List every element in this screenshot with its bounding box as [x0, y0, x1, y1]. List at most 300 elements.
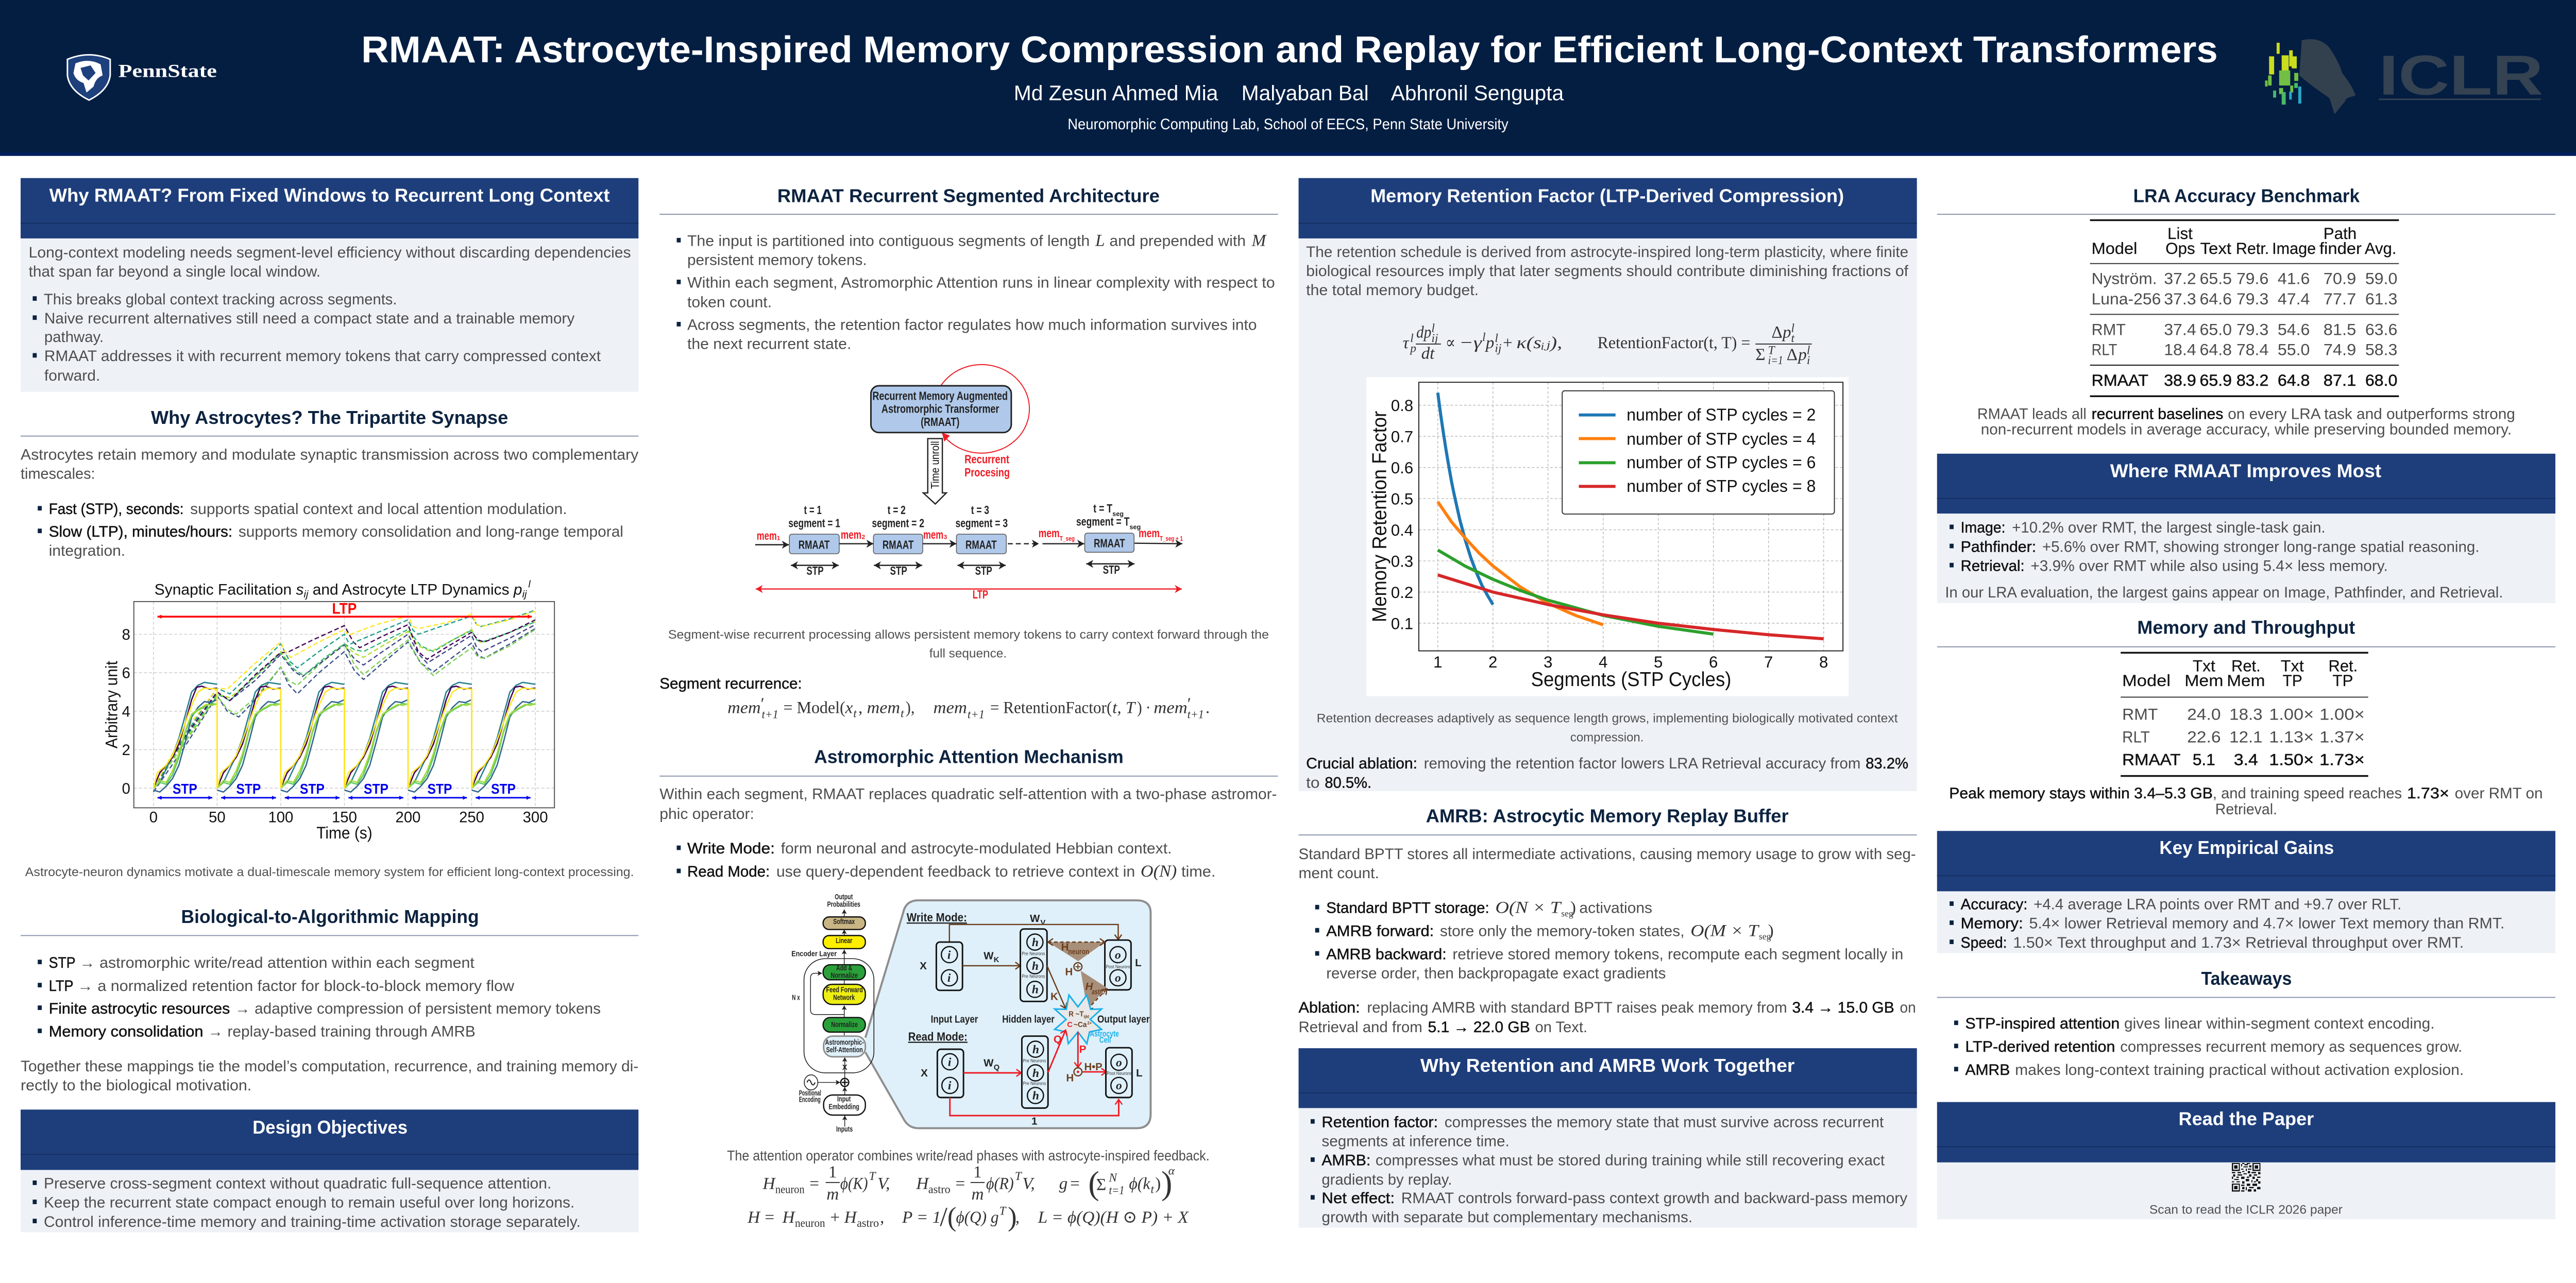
equations: retention factor: i [1807, 354, 1810, 367]
equations: retention factor: κ(sᵢⱼ), [1516, 333, 1562, 352]
affiliation: Neuromorphic Computing Lab, School of EECS, Penn State University [1067, 116, 1509, 133]
text block: Astrocytes retain memory and modulate synaptic transmission across two complementary [21, 447, 639, 464]
icon: astrocyte cell star: ~Ca [1074, 1021, 1087, 1029]
row: RLT: 74.9 [2324, 340, 2356, 358]
read mode: Q [1054, 1033, 1062, 1045]
equations: retention factor: Δ [1787, 345, 1798, 364]
read mode: X [921, 1067, 928, 1079]
row: RMT: 1.00× [2269, 705, 2314, 723]
segment boxes: RMAAT [1094, 536, 1125, 550]
equation: segment recurrence: mem [1154, 698, 1188, 717]
equations: attention operator: m [971, 1185, 984, 1204]
write mode: H [1065, 966, 1073, 978]
row: RMT: RMT [2122, 705, 2158, 723]
text block: forward. [44, 367, 100, 384]
encoder stack: Add & [836, 964, 853, 972]
callout: ablation: on Text. [1535, 1019, 1587, 1036]
memory labels: T_seg [1060, 535, 1075, 542]
text block [21, 1058, 638, 1094]
axis labels: Memory Retention Factor [1368, 411, 1391, 622]
equations: retention factor: l [1482, 331, 1485, 344]
chart: synaptic facilitation and LTP dynamics: and Astrocyte LTP Dynamics [308, 581, 514, 598]
box: RMAAT main: (RMAAT) [921, 415, 959, 429]
mapping list: Memory consolidation [49, 1023, 204, 1040]
row: RLT: 55.0 [2278, 340, 2310, 358]
equations: attention operator: V, [877, 1174, 890, 1193]
row: RMT: 79.3 [2236, 320, 2268, 338]
write mode: Pre Neurons [1022, 973, 1045, 979]
caption: on every LRA task and outperforms strong [2228, 405, 2515, 422]
solid STP curves [154, 682, 535, 792]
row: RLT: RLT [2092, 340, 2117, 358]
time labels: segment = 2 [872, 516, 924, 529]
table: accuracy: Model [2092, 240, 2137, 258]
callout: ablation: Retrieval and from [1299, 1019, 1422, 1036]
axis labels: 1 [1433, 653, 1442, 671]
memory labels [757, 526, 1183, 542]
text block: the total memory budget. [1306, 282, 1479, 299]
bullets: seg [1561, 908, 1573, 918]
segment boxes [789, 533, 1134, 554]
equation: segment recurrence: ), [906, 698, 914, 717]
STP arrows: STP [173, 781, 197, 797]
equations: attention operator: ) [1155, 1174, 1161, 1193]
text block: time. [1181, 863, 1215, 880]
write mode: K [1050, 990, 1058, 1002]
equations: retention factor: −γ [1459, 333, 1482, 352]
bullets: reverse order, then backpropagate exact gradients [1326, 965, 1666, 982]
row: RLT [2092, 340, 2397, 358]
text block: rectly to the biological motivation. [21, 1077, 251, 1094]
bullets: 5.4× lower Retrieval memory and 4.7× lower Text memory than RMT. [2029, 915, 2504, 932]
equations: attention operator: T [1015, 1170, 1023, 1183]
write mode: W [1030, 913, 1040, 925]
text block: pathway. [44, 329, 104, 346]
encoder stack: Normalize [831, 971, 858, 980]
write mode: h [1032, 983, 1039, 997]
text block: phic operator: [659, 806, 754, 823]
row: RLT: 64.8 [2200, 340, 2232, 358]
encoder stack: Encoding [799, 1096, 821, 1104]
read mode: P [1079, 1043, 1086, 1055]
encoder stack: Astromorphic- [825, 1038, 864, 1047]
bullets: store only the memory-token states, [1440, 922, 1685, 939]
axis labels: 0.7 [1391, 427, 1413, 446]
panel: Takeaways [1937, 968, 2555, 1079]
STP arrows: STP [1103, 563, 1120, 576]
axis labels: 0.6 [1391, 459, 1413, 477]
write mode: H [1061, 942, 1069, 953]
row: Luna-256 [2092, 290, 2397, 308]
write mode: X [920, 960, 927, 972]
equations: attention operator: t [1150, 1183, 1154, 1196]
bullets: Pathfinder: [1961, 538, 2036, 555]
table: memory and throughput [2121, 652, 2368, 777]
row: RLT: 18.4 [2164, 340, 2196, 358]
encoder stack: Network [833, 994, 855, 1002]
text block: Read Mode: [687, 863, 770, 880]
bullets: O(M × T [1690, 921, 1760, 940]
table: memory and throughput: Ret. [2231, 657, 2261, 675]
equations: attention operator: H [747, 1208, 761, 1227]
row: Luna-256: 77.7 [2324, 290, 2356, 308]
read mode: Read Mode: [908, 1030, 968, 1043]
bullets [1945, 519, 2503, 601]
text block: The retention schedule is derived from astrocyte-inspired long-term plasticity, where finite [1306, 244, 1908, 261]
bullets: ) [1768, 921, 1774, 940]
bullets [1315, 898, 1903, 982]
equations: attention operator: L = ϕ(Q)(H ⊙ P) + X [1038, 1208, 1189, 1227]
callout: ablation: Ablation: [1299, 999, 1360, 1016]
table: accuracy: Retr. [2236, 240, 2269, 258]
equations: retention factor: l [1410, 332, 1414, 345]
table: accuracy: finder [2319, 240, 2362, 258]
equation: segment recurrence: . [1206, 698, 1210, 717]
equations: attention operator: astro [928, 1183, 951, 1196]
caption: non-recurrent models in average accuracy, while preserving bounded memory. [1981, 421, 2512, 438]
STP arrows [791, 563, 1134, 577]
panel: Astromorphic Attention Mechanism [659, 746, 1278, 1232]
encoder stack [791, 893, 874, 1134]
mapping list: STP [49, 954, 75, 971]
time labels: t = 3 [971, 503, 989, 517]
panel: Why Retention and AMRB Work Together [1299, 1048, 1917, 1228]
box: RMAAT main [871, 386, 1011, 433]
caption: The attention operator combines write/read phases with astrocyte-inspired feedback. [727, 1148, 1210, 1164]
axis labels [103, 626, 548, 842]
read mode: H•P [1084, 1061, 1103, 1073]
bullets: AMRB [1965, 1062, 2010, 1079]
row: Luna-256: 37.3 [2164, 290, 2196, 308]
layer labels [931, 1013, 1149, 1025]
row: Luna-256: 64.6 [2200, 290, 2232, 308]
row: Nystrom: 41.6 [2278, 270, 2310, 288]
row: Nystrom [2092, 270, 2397, 288]
equation: segment recurrence: ) · [1137, 698, 1150, 717]
architecture bullets: Across segments, the retention factor regulates how much information survives into [687, 317, 1257, 334]
equations: retention factor: τ [1403, 333, 1410, 352]
chart: synaptic facilitation and LTP dynamics: ij [522, 589, 527, 600]
caption: recurrent baselines [2092, 405, 2223, 422]
panel: Memory Retention Factor [1299, 178, 1917, 791]
equations: retention factor: + [1503, 333, 1513, 352]
bullets: +10.2% over RMT, the largest single-task gain. [2012, 519, 2326, 536]
equations: attention operator: + [830, 1208, 840, 1227]
text block: supports memory consolidation and long-range temporal [239, 523, 623, 540]
axis labels: 300 [523, 809, 548, 826]
chart: synaptic facilitation and LTP dynamics [103, 579, 554, 842]
axis labels: Time (s) [316, 824, 372, 842]
bullets: compresses recurrent memory as sequences grow. [2120, 1038, 2462, 1055]
memory labels: mem₂ [841, 528, 866, 541]
caption: RMAAT leads all [1977, 405, 2087, 422]
axis labels: Arbitrary unit [103, 661, 121, 748]
encoder stack: Inputs [836, 1125, 853, 1134]
read mode: L [1136, 1067, 1143, 1079]
equations: attention operator [747, 1162, 1189, 1232]
heading: LRA Accuracy Benchmark [2133, 185, 2360, 207]
axis labels: 200 [396, 809, 420, 826]
row: Nystrom: 70.9 [2324, 270, 2356, 288]
encoder stack: Encoder Layer [791, 950, 837, 958]
label: recurrent processing: Procesing [964, 466, 1010, 479]
encoder stack: Embedding [828, 1103, 859, 1111]
mapping list: → a normalized retention factor for block-to-block memory flow [77, 978, 515, 995]
box: RMAAT main: Astromorphic Transformer [882, 402, 999, 416]
axis labels: 3 [1544, 653, 1552, 671]
heading: Astromorphic Attention Mechanism [814, 746, 1124, 767]
bullets: AMRB forward: [1326, 922, 1434, 939]
data curves [1438, 392, 1824, 639]
equations: attention operator: t=1 [1109, 1184, 1125, 1197]
heading: RMAAT Recurrent Segmented Architecture [777, 185, 1160, 207]
table: memory and throughput: Model [2122, 672, 2171, 690]
bullets: Speed: [1961, 934, 2007, 951]
encoder stack: Input [837, 1096, 851, 1104]
row: RMAAT: 1.50× [2269, 750, 2314, 768]
authors: Md Zesun Ahmed Mia Malyaban Bal Abhronil Sengupta [1014, 81, 1564, 105]
equations: attention operator: H [782, 1208, 796, 1227]
bullets: makes long-context training practical without activation explosion. [2015, 1062, 2464, 1079]
equations: attention operator: /( [940, 1202, 956, 1232]
time labels: segment = 1 [788, 516, 840, 529]
equations: retention factor: l [1431, 322, 1435, 335]
architecture bullets: and prepended with [1109, 233, 1246, 250]
row: RLT: 1.37× [2319, 728, 2365, 746]
bullets: segments at inference time. [1321, 1133, 1510, 1150]
encoder stack: Linear [836, 937, 853, 945]
axis labels: 6 [122, 664, 130, 681]
equations: attention operator: , [880, 1208, 884, 1227]
equations: attention operator: H [916, 1174, 929, 1193]
memory labels: mem₃ [923, 528, 947, 541]
axis labels: 2 [122, 742, 130, 759]
row: RMT: 54.6 [2278, 320, 2310, 338]
row: RMT: 1.00× [2319, 705, 2365, 723]
table: accuracy: Ops [2165, 240, 2195, 258]
table: memory and throughput: Mem [2227, 672, 2265, 690]
bullets: +5.6% over RMT, showing stronger long-range spatial reasoning. [2042, 538, 2479, 555]
objectives list: Keep the recurrent state compact enough to remain useful over long horizons. [44, 1194, 574, 1211]
equations: retention factor: l [1791, 322, 1794, 335]
callout: crucial ablation: removing the retention factor lowers LRA Retrieval accuracy from [1424, 755, 1860, 772]
write mode: W [984, 950, 994, 962]
axis labels: 0.3 [1391, 553, 1413, 571]
caption: Scan to read the ICLR 2026 paper [2149, 1203, 2343, 1217]
STP arrows: STP [975, 564, 992, 577]
equation: segment recurrence: t+1 [1188, 708, 1204, 722]
equations: attention operator: neuron [775, 1183, 805, 1196]
text block: integration. [49, 542, 125, 559]
bullets [1311, 1114, 1908, 1226]
equations: retention factor: p [1485, 333, 1494, 352]
row: RMT: 18.3 [2229, 705, 2263, 723]
axis labels: 150 [332, 809, 357, 826]
text block: Write Mode: [687, 840, 775, 857]
chart: synaptic facilitation and LTP dynamics: l [528, 579, 531, 590]
memory labels: mem [1039, 526, 1060, 540]
caption [1977, 405, 2515, 438]
LTP arrow: LTP [973, 588, 988, 601]
title: RMAAT: Astrocyte-Inspired Memory Compression and Replay for Efficient Long-Context Transformers [361, 29, 2218, 71]
row: Nystrom: 65.5 [2200, 270, 2232, 288]
table: memory and throughput: TP [2283, 672, 2302, 690]
row: RMAAT [2122, 750, 2365, 768]
mapping list: → astromorphic write/read attention within each segment [79, 954, 474, 971]
equation: segment recurrence: t+1 [762, 708, 778, 722]
row: RMAAT: 65.9 [2200, 371, 2232, 389]
bullets: ) [1570, 898, 1576, 917]
table: accuracy: List [2167, 225, 2193, 243]
bullets: +4.4 average LRA points over RMT and +9.7 over RLT. [2033, 896, 2401, 913]
axis labels: 7 [1764, 653, 1773, 671]
icon: astrocyte cell star: 2+ [1087, 1021, 1092, 1025]
write mode: H [1085, 981, 1093, 993]
legend: number of STP cycles = 2 [1626, 405, 1816, 424]
bullets: O(N × T [1495, 898, 1562, 917]
equation: segment recurrence: x [845, 698, 853, 717]
equations: retention factor: t [1791, 332, 1795, 345]
memory labels: mem [1139, 526, 1160, 540]
chart: synaptic facilitation and LTP dynamics: p [513, 581, 527, 600]
bullets: retrieve stored memory tokens, recompute each segment locally in [1452, 946, 1903, 963]
bullets [1954, 1015, 2464, 1079]
row: RMAAT: 83.2 [2236, 371, 2268, 389]
dashed LTP curves [154, 610, 535, 792]
read mode: Post Neurons [1107, 1071, 1132, 1076]
encoder stack: Output [835, 893, 853, 901]
read mode: h [1032, 1067, 1039, 1080]
caption: compression. [1570, 730, 1643, 744]
table: accuracy [2090, 219, 2399, 397]
logo: Penn State [67, 55, 217, 100]
read mode: h [1032, 1089, 1039, 1103]
equations: retention factor: l [1495, 332, 1498, 345]
STP arrows: STP [428, 781, 452, 797]
mapping list: LTP [49, 978, 74, 995]
table: accuracy: Text [2200, 240, 2231, 258]
write mode: h [1032, 936, 1039, 949]
callout: crucial ablation [1306, 755, 1908, 791]
axis labels: 4 [1599, 653, 1607, 671]
equations: retention factor [1403, 322, 1812, 367]
equations: attention operator: T [999, 1204, 1007, 1218]
layer labels: Hidden layer [1002, 1013, 1055, 1025]
STP arrows [158, 781, 531, 798]
chart: synaptic facilitation and LTP dynamics: ij [304, 589, 309, 600]
equations: retention factor: Δ [1771, 322, 1783, 341]
encoder stack: N x [792, 994, 800, 1002]
label: recurrent processing [964, 452, 1010, 479]
equations: attention operator: = [1070, 1174, 1080, 1193]
write mode: astro [1092, 988, 1105, 997]
row: RMT: 63.6 [2365, 320, 2397, 338]
bullets: compresses the memory state that must survive across recurrent [1445, 1114, 1884, 1131]
layer labels: Input Layer [931, 1013, 978, 1025]
table: memory and throughput: Txt [2193, 657, 2215, 675]
header banner [0, 0, 2576, 156]
axis labels: 4 [122, 704, 130, 721]
icon: astrocyte cell star: C [1067, 1021, 1073, 1029]
write mode: o [1115, 971, 1121, 985]
text block: timescales: [21, 466, 95, 483]
text block: O(N) [1141, 862, 1177, 881]
write mode: Post Neurons [1106, 964, 1131, 969]
text block: form neuronal and astrocyte-modulated Hebbian context. [781, 840, 1172, 857]
write mode: i [947, 971, 951, 985]
axis labels: 100 [268, 809, 293, 826]
table: memory and throughput: Txt [2281, 657, 2304, 675]
axis labels: 250 [459, 809, 484, 826]
bullets: growth with separate but complementary mechanisms. [1321, 1209, 1692, 1226]
row: RMT: 37.4 [2164, 320, 2196, 338]
chart: synaptic facilitation and LTP dynamics: Synaptic Facilitation s [155, 581, 303, 598]
table: accuracy: Image [2272, 240, 2316, 258]
equations: attention operator: neuron [795, 1217, 825, 1230]
encoder stack: Softmax [833, 918, 855, 926]
equation: segment recurrence: t [853, 707, 857, 721]
callout: crucial ablation: to [1306, 774, 1320, 791]
bullets: Retrieval: [1961, 557, 2025, 574]
text block: Slow (LTP), minutes/hours: [49, 523, 232, 540]
STP arrows: STP [236, 781, 261, 797]
bullets: +3.9% over RMT while also using 5.4× less memory. [2030, 557, 2388, 574]
heading: Design Objectives [252, 1117, 408, 1138]
text block: that span far beyond a single local window. [29, 263, 320, 280]
heading: AMRB: Astrocytic Memory Replay Buffer [1426, 806, 1789, 827]
row: Luna-256: 79.3 [2236, 290, 2268, 308]
memory arrows [755, 543, 1182, 545]
encoder stack: Feed Forward [826, 986, 863, 995]
zoom panel: write and read modes [791, 893, 1150, 1134]
equations: attention operator: ) [1161, 1165, 1172, 1201]
row: Nystrom: 37.2 [2164, 270, 2196, 288]
equations: retention factor: p [1797, 345, 1807, 364]
equations: attention operator: = [809, 1174, 819, 1193]
panel: Why RMAAT [21, 178, 638, 392]
bullets: Image: [1961, 519, 2006, 536]
objectives list [32, 1175, 581, 1230]
caption: Peak memory stays within 3.4–5.3 GB [1949, 785, 2213, 802]
caption [668, 628, 1269, 660]
equations: attention operator: ϕ(Q) g [956, 1208, 998, 1227]
STP arrows: STP [491, 781, 516, 797]
icon: astrocyte cell star: Astrocyte [1090, 1029, 1119, 1039]
architecture bullets: M [1251, 231, 1267, 250]
memory labels: mem₁ [757, 529, 781, 542]
bullets: Accuracy: [1961, 896, 2028, 913]
equations: attention operator: astro [857, 1217, 879, 1230]
row: RLT: 58.3 [2365, 340, 2397, 358]
text block [21, 447, 639, 559]
axis labels: 5 [1654, 653, 1663, 671]
equations: attention operator: ) [1008, 1202, 1017, 1232]
arrow: time unroll: Time unroll [928, 441, 941, 489]
bullets: LTP-derived retention [1965, 1038, 2115, 1055]
equations: attention operator: N [1108, 1171, 1117, 1185]
legend [1562, 391, 1835, 514]
equation: segment recurrence [727, 694, 1210, 722]
architecture bullets [676, 231, 1275, 353]
equations: attention operator: m [826, 1185, 839, 1204]
bullets: In our LRA evaluation, the largest gains appear on Image, Pathfinder, and Retrieval. [1945, 584, 2503, 601]
time labels [788, 502, 1141, 531]
architecture bullets: Within each segment, Astromorphic Attention runs in linear complexity with respect to [687, 275, 1275, 292]
callout: ablation [1299, 999, 1916, 1036]
row: RMAAT: RMAAT [2122, 750, 2180, 768]
diagram: recurrent unrolling [755, 365, 1183, 601]
write mode: h [1032, 960, 1039, 973]
